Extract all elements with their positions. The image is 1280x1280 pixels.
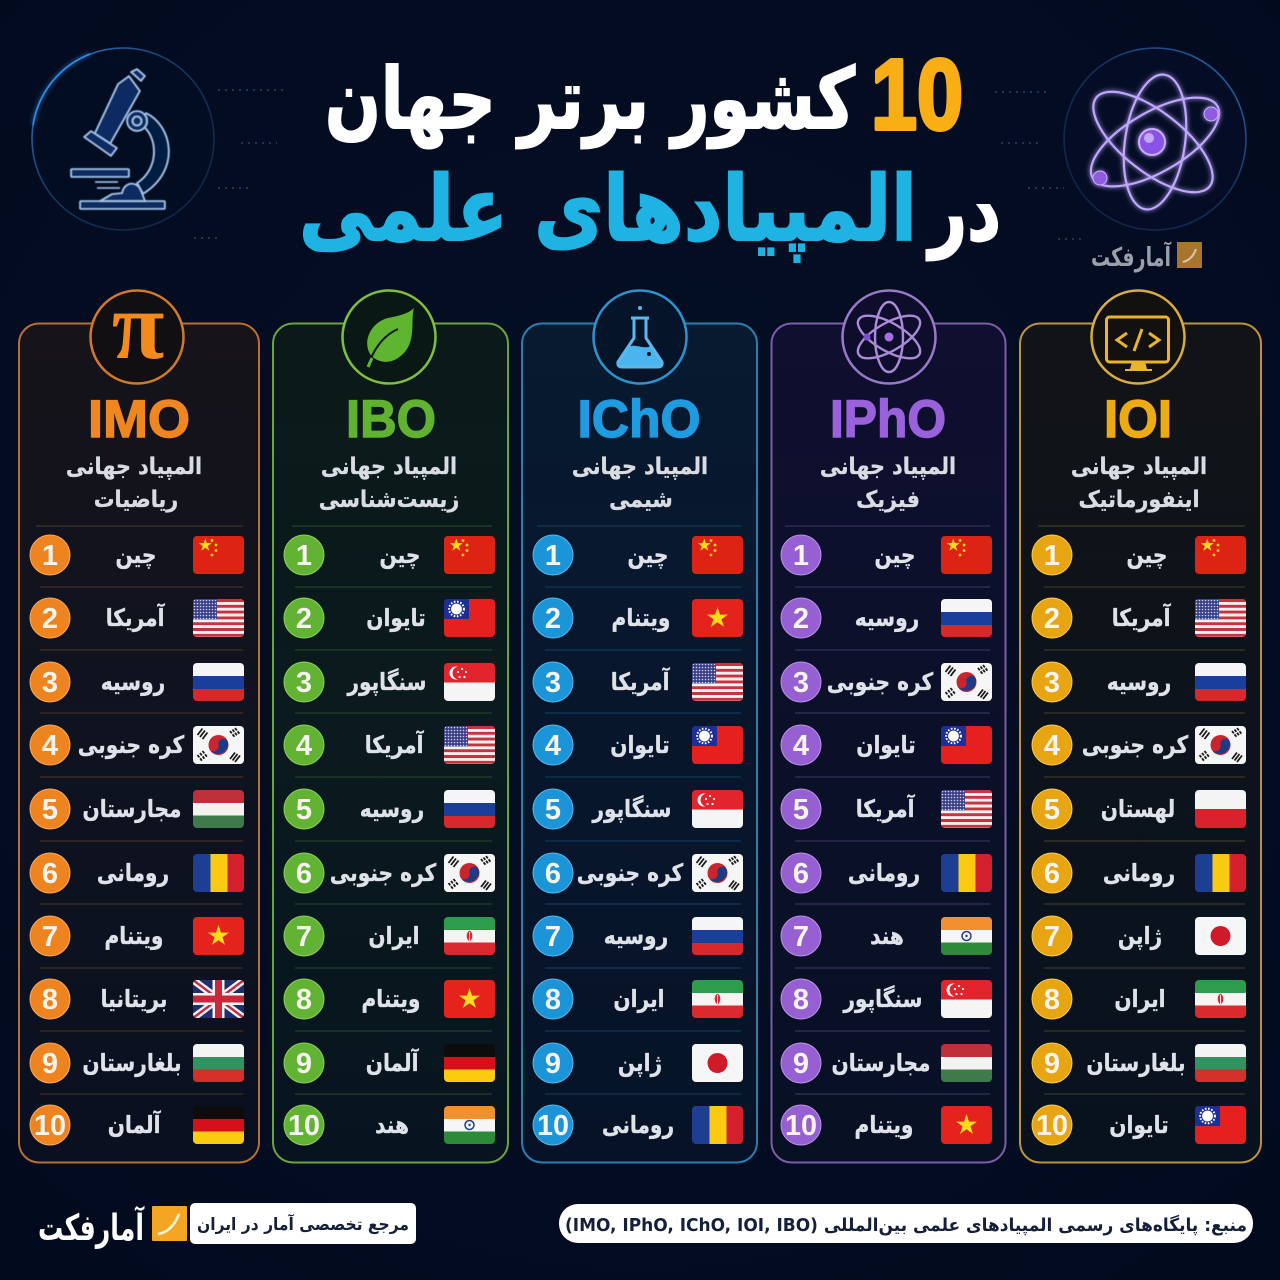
row 10	[533, 1105, 743, 1145]
row 8: 8	[42, 984, 58, 1016]
row 10: ویتنام	[855, 1111, 913, 1139]
row 9: 9	[296, 1048, 312, 1080]
row 2: روسیه	[855, 604, 919, 632]
subtitle: المپیاد جهانی	[321, 454, 457, 480]
row 5	[533, 789, 743, 829]
row 9	[30, 1043, 244, 1083]
row 9: 9	[545, 1048, 561, 1080]
row 4: آمریکا	[365, 729, 425, 759]
row 5	[30, 789, 244, 829]
row 7	[30, 916, 244, 956]
row 2	[1032, 598, 1246, 638]
row 1: 1	[42, 540, 58, 572]
subtitle: المپیاد جهانی	[66, 454, 202, 480]
row 4	[1032, 725, 1246, 765]
row 5: لهستان	[1101, 795, 1175, 823]
row 3: 3	[42, 667, 58, 699]
subtitle	[319, 454, 459, 513]
title	[299, 39, 1001, 262]
row 4: 4	[545, 730, 561, 762]
row 8: بریتانیا	[101, 985, 167, 1013]
heading: IOI	[1104, 390, 1172, 449]
row 9: 9	[1044, 1048, 1060, 1080]
title line 1 number: 10	[871, 39, 963, 151]
row 3: سنگاپور	[346, 667, 426, 696]
row 4: کره جنوبی	[78, 731, 184, 759]
row 8: ایران	[1114, 985, 1166, 1013]
row 6	[284, 853, 495, 893]
row 5	[1032, 789, 1246, 829]
row 5: 5	[793, 794, 809, 826]
icon: atom	[1064, 48, 1246, 230]
row 10: 10	[34, 1110, 66, 1142]
footer logo: آمارفکت	[38, 1205, 145, 1249]
row 3: 3	[296, 667, 312, 699]
row 10: 10	[288, 1110, 320, 1142]
row 1: چین	[1127, 541, 1167, 569]
row 2	[533, 598, 743, 638]
row 9: مجارستان	[832, 1049, 930, 1077]
row 7: 7	[1044, 921, 1060, 953]
row 3	[284, 662, 495, 702]
row 8: ویتنام	[362, 985, 420, 1013]
row 4: 4	[42, 730, 58, 762]
title line 2 cyan: المپیادهای علمی	[299, 157, 917, 262]
subtitle: ریاضیات	[94, 487, 178, 513]
icon: flask	[594, 290, 686, 384]
row 10	[781, 1105, 992, 1145]
row 10: تایوان	[1109, 1111, 1169, 1139]
row 3	[1032, 662, 1246, 702]
row 3: 3	[1044, 667, 1060, 699]
row 8	[1032, 979, 1246, 1019]
tagline pill	[190, 1203, 416, 1244]
row 2: تایوان	[366, 604, 426, 632]
row 4: کره جنوبی	[1082, 731, 1188, 759]
row 7: 7	[793, 921, 809, 953]
tagline pill: مرجع تخصصی آمار در ایران	[197, 1213, 409, 1235]
row 1: چین	[380, 541, 420, 569]
row 3: روسیه	[101, 668, 165, 696]
row 1: 1	[545, 540, 561, 572]
row 3	[533, 662, 743, 702]
row 4: 4	[1044, 730, 1060, 762]
row 9: بلغارستان	[1086, 1049, 1186, 1077]
row 5: 5	[296, 794, 312, 826]
row 6: کره جنوبی	[577, 859, 683, 887]
row 6	[1032, 853, 1246, 893]
row 7	[781, 916, 992, 956]
row 4: 4	[793, 730, 809, 762]
row 7: روسیه	[604, 922, 668, 950]
row 5: سنگاپور	[591, 794, 671, 823]
row 7: ویتنام	[105, 922, 163, 950]
panel: IPhO	[772, 290, 1006, 1162]
subtitle	[820, 454, 956, 513]
row 6: کره جنوبی	[330, 859, 436, 887]
row 5: 5	[545, 794, 561, 826]
row 5	[781, 789, 992, 829]
subtitle: شیمی	[609, 487, 673, 513]
row 7	[533, 916, 743, 956]
icon: code monitor	[1092, 290, 1184, 384]
row 2: ویتنام	[612, 604, 670, 632]
row 6: رومانی	[1103, 859, 1175, 887]
row 5: 5	[42, 794, 58, 826]
row 2	[30, 598, 244, 638]
row 8: 8	[793, 984, 809, 1016]
row 9: 9	[793, 1048, 809, 1080]
row 1: چین	[116, 541, 156, 569]
row 10	[284, 1105, 495, 1145]
heading: IChO	[578, 390, 700, 449]
row 7: 7	[42, 921, 58, 953]
row 10: آلمان	[108, 1109, 162, 1139]
row 6: 6	[1044, 858, 1060, 890]
row 8	[284, 979, 495, 1019]
icon: leaf	[342, 290, 436, 384]
row 9	[1032, 1043, 1246, 1083]
row 9: بلغارستان	[82, 1049, 182, 1077]
subtitle: المپیاد جهانی	[572, 454, 708, 480]
row 1: 1	[793, 540, 809, 572]
row 8: 8	[545, 984, 561, 1016]
icon: microscope	[32, 48, 214, 230]
row 10: 10	[785, 1110, 817, 1142]
row 6: 6	[793, 858, 809, 890]
row 5: 5	[1044, 794, 1060, 826]
row 6: 6	[545, 858, 561, 890]
row 6	[30, 853, 244, 893]
row 4: 4	[296, 730, 312, 762]
row 8	[781, 979, 992, 1019]
row 7: 7	[296, 921, 312, 953]
row 8: 8	[1044, 984, 1060, 1016]
row 3: کره جنوبی	[827, 668, 933, 696]
panel: IChO	[522, 290, 757, 1162]
heading: IPhO	[830, 390, 946, 449]
row 7: 7	[545, 921, 561, 953]
row 7	[284, 916, 495, 956]
row 2	[781, 598, 992, 638]
row 1: چین	[875, 541, 915, 569]
row 3	[30, 662, 244, 702]
row 6: رومانی	[848, 859, 920, 887]
row 1: چین	[628, 541, 668, 569]
row 6	[533, 853, 743, 893]
row 3: 3	[545, 667, 561, 699]
row 3: 3	[793, 667, 809, 699]
row 3	[781, 662, 992, 702]
panel: IMO	[19, 272, 259, 1162]
title line 1 text: کشور برتر جهان	[325, 50, 855, 149]
row 9	[284, 1043, 495, 1083]
row 9: ژاپن	[618, 1049, 662, 1077]
subtitle	[66, 454, 202, 513]
row 2: 2	[545, 603, 561, 635]
row 8: ایران	[613, 985, 665, 1013]
heading: IMO	[88, 390, 190, 449]
row 7: هند	[870, 922, 904, 950]
subtitle	[1071, 454, 1207, 513]
row 3: آمریکا	[611, 666, 671, 696]
row 10	[1032, 1105, 1246, 1145]
row 4	[781, 725, 992, 765]
row 6	[781, 853, 992, 893]
icon: atom small	[842, 290, 936, 384]
panel: IBO	[273, 290, 508, 1162]
row 2: 2	[1044, 603, 1060, 635]
watermark logo: آمارفکت	[1091, 241, 1172, 273]
row 6: رومانی	[97, 859, 169, 887]
row 9	[781, 1043, 992, 1083]
row 10: 10	[537, 1110, 569, 1142]
row 9: آلمان	[366, 1047, 420, 1077]
row 5: مجارستان	[83, 795, 181, 823]
row 4	[284, 725, 495, 765]
row 4	[533, 725, 743, 765]
row 2: 2	[42, 603, 58, 635]
icon: pi: π	[112, 272, 164, 379]
row 1: 1	[1044, 540, 1060, 572]
row 1: 1	[296, 540, 312, 572]
subtitle: اینفورماتیک	[1078, 487, 1200, 513]
heading: IBO	[346, 390, 436, 449]
row 7	[1032, 916, 1246, 956]
row 5: آمریکا	[856, 793, 916, 823]
row 10: هند	[375, 1111, 409, 1139]
row 2: 2	[793, 603, 809, 635]
row 10: 10	[1036, 1110, 1068, 1142]
row 4: تایوان	[610, 731, 670, 759]
row 3: روسیه	[1107, 668, 1171, 696]
title line 2 white: در	[926, 162, 1001, 261]
row 10	[30, 1105, 244, 1145]
subtitle: المپیاد جهانی	[820, 454, 956, 480]
row 6: 6	[296, 858, 312, 890]
source pill	[559, 1204, 1253, 1243]
panel: IOI	[1020, 290, 1261, 1162]
subtitle	[572, 454, 708, 513]
row 10: رومانی	[602, 1111, 674, 1139]
row 1	[533, 535, 743, 575]
row 7: ایران	[368, 922, 420, 950]
row 8: 8	[296, 984, 312, 1016]
row 8	[533, 979, 743, 1019]
row 2	[284, 598, 495, 638]
row 2: آمریکا	[1112, 602, 1172, 632]
row 2: 2	[296, 603, 312, 635]
row 1	[30, 535, 244, 575]
row 1	[284, 535, 495, 575]
subtitle: زیست‌شناسی	[319, 487, 459, 513]
source pill: منبع: پایگاه‌های رسمی المپیادهای علمی بین‌المللی (IMO, IPhO, IChO, IOI, IBO)	[565, 1214, 1247, 1236]
row 5: روسیه	[360, 795, 424, 823]
row 7: ژاپن	[1118, 922, 1162, 950]
row 6: 6	[42, 858, 58, 890]
row 9	[533, 1043, 743, 1083]
row 1	[781, 535, 992, 575]
row 8: سنگاپور	[842, 984, 922, 1013]
row 1	[1032, 535, 1246, 575]
row 2: آمریکا	[106, 602, 166, 632]
row 4	[30, 725, 244, 765]
row 4: تایوان	[856, 731, 916, 759]
icon: pi	[90, 272, 184, 384]
row 9: 9	[42, 1048, 58, 1080]
row 5	[284, 789, 495, 829]
subtitle: المپیاد جهانی	[1071, 454, 1207, 480]
row 8	[30, 979, 244, 1019]
subtitle: فیزیک	[856, 487, 920, 513]
